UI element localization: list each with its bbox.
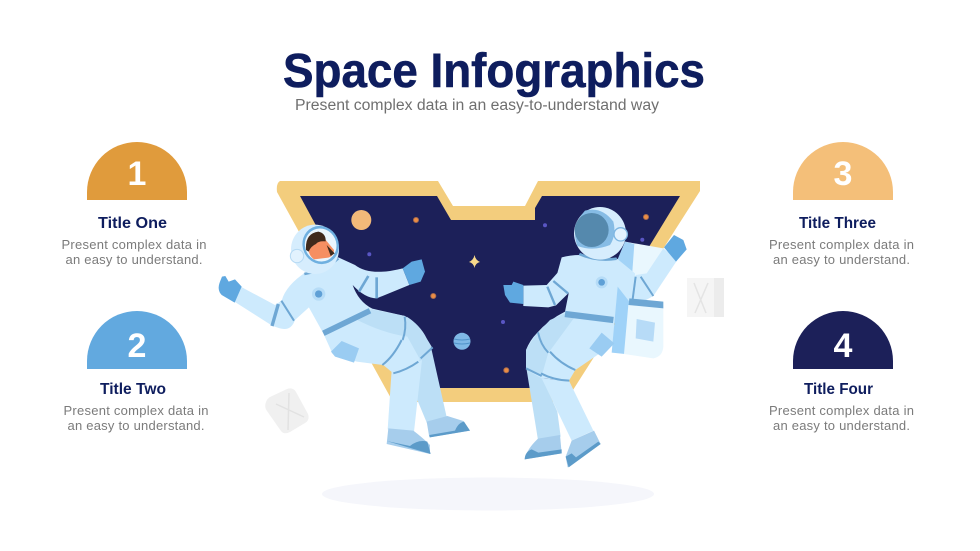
near boot	[387, 428, 431, 454]
orange dots	[414, 214, 648, 373]
pocket	[331, 341, 359, 363]
hair	[306, 232, 335, 256]
near leg	[542, 378, 593, 441]
planet orange	[351, 210, 371, 230]
near boot	[566, 431, 601, 467]
badge two	[87, 311, 187, 369]
description one: Present complex data in	[62, 237, 206, 252]
floating box left	[265, 388, 309, 433]
far boot	[427, 416, 470, 437]
description four: an easy to understand.	[773, 418, 910, 433]
astronaut left	[219, 220, 470, 454]
chest badge	[312, 287, 325, 301]
far leg	[527, 370, 561, 440]
shoulder panel	[617, 242, 663, 303]
heading two: Title Two	[100, 381, 166, 398]
badge one	[87, 142, 187, 200]
heading one: Title One	[98, 215, 167, 232]
hand pouch	[589, 333, 614, 357]
description four: Present complex data in	[769, 403, 914, 418]
far boot	[525, 435, 562, 459]
panel: item four	[769, 311, 914, 433]
description three: an easy to understand.	[773, 252, 910, 267]
near leg	[388, 360, 422, 432]
panel: item three	[769, 142, 914, 267]
purple dots	[367, 223, 644, 324]
helmet joint	[614, 228, 627, 241]
astronaut right	[503, 207, 687, 467]
badge four	[793, 311, 893, 369]
backpack strap	[629, 298, 663, 308]
window frame	[277, 181, 700, 402]
star	[469, 255, 480, 268]
description three: Present complex data in	[769, 237, 914, 252]
window space	[300, 196, 680, 388]
subtitle: Present complex data in an easy-to-understand way	[295, 97, 659, 114]
hip shade	[526, 313, 575, 376]
ground shadow	[322, 478, 654, 510]
rear arm	[523, 270, 570, 307]
rear glove	[219, 276, 242, 303]
floating box right	[687, 278, 724, 317]
heading four: Title Four	[804, 381, 873, 398]
number four: 4	[834, 327, 853, 365]
torso	[303, 257, 423, 373]
rear glove	[503, 282, 523, 304]
badge three	[793, 142, 893, 200]
far leg	[407, 317, 447, 424]
forearm	[633, 248, 677, 303]
face	[308, 235, 334, 259]
description two: an easy to understand.	[68, 418, 204, 433]
backpack	[612, 287, 663, 358]
panel: item one	[62, 142, 206, 267]
torso	[526, 255, 635, 381]
backpack pocket	[636, 319, 655, 342]
heading three: Title Three	[799, 215, 876, 232]
number two: 2	[128, 327, 146, 365]
glove	[664, 235, 687, 262]
front glove	[403, 259, 425, 285]
number one: 1	[128, 155, 146, 193]
panel: item two	[64, 311, 208, 433]
description two: Present complex data in	[64, 403, 208, 418]
number three: 3	[834, 155, 852, 193]
helmet joint	[290, 249, 304, 263]
rear arm	[234, 272, 313, 329]
hip shade	[356, 309, 432, 359]
spaceship window	[277, 181, 700, 402]
helmet	[574, 207, 627, 260]
chest badge	[596, 276, 608, 288]
description one: an easy to understand.	[66, 252, 202, 267]
helmet	[290, 220, 345, 274]
suit stripes	[272, 258, 433, 373]
suit stripes	[526, 254, 653, 381]
title: Space Infographics	[283, 45, 705, 98]
planet blue	[454, 333, 470, 350]
